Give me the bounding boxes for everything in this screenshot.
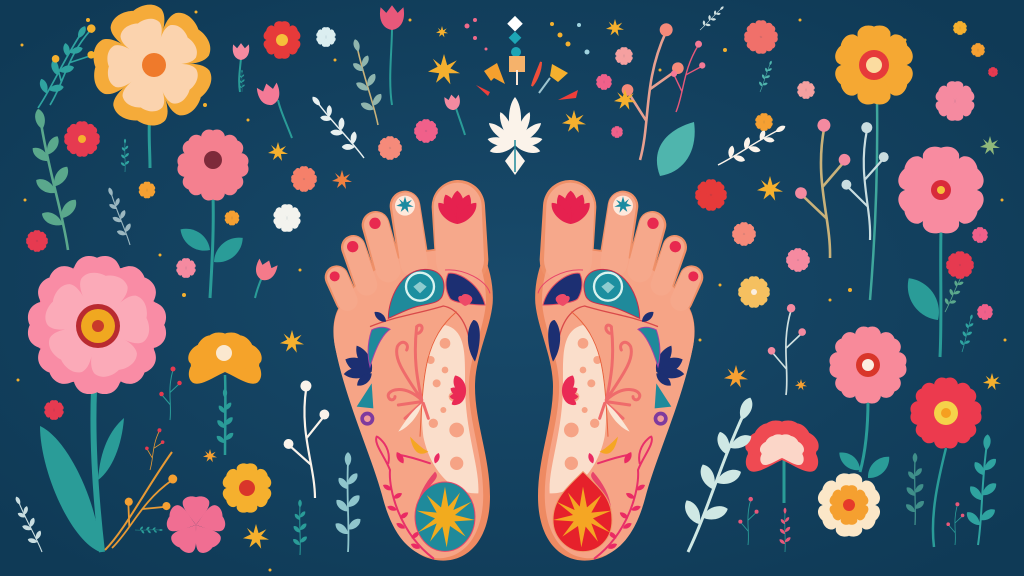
orange flower top left	[72, 0, 236, 168]
small flowers left	[26, 26, 460, 549]
pink lotus left	[176, 129, 249, 298]
left foot	[330, 191, 493, 561]
orange lotus left	[184, 331, 266, 455]
sprigs right	[612, 3, 1004, 561]
pink flower right	[894, 147, 988, 357]
pink flower lower right	[830, 327, 906, 483]
sprigs left	[8, 15, 391, 561]
top centre ornament	[464, 16, 590, 100]
buds left	[233, 5, 465, 298]
white lotus ornament	[486, 97, 544, 175]
teal leaf top right	[657, 122, 695, 176]
orange flower top right	[832, 26, 916, 300]
lotus lower right	[741, 419, 823, 503]
red flower top	[262, 21, 302, 59]
right heel medallion	[553, 472, 612, 552]
right foot	[535, 191, 698, 561]
small flowers right	[562, 19, 1001, 390]
yellow flower bottom left	[220, 463, 274, 513]
left heel medallion	[415, 482, 475, 551]
red flower lower right	[910, 377, 982, 547]
white orange flower	[815, 473, 883, 537]
large pink flower with stem	[15, 243, 179, 552]
pink flower bottom left	[165, 496, 227, 556]
